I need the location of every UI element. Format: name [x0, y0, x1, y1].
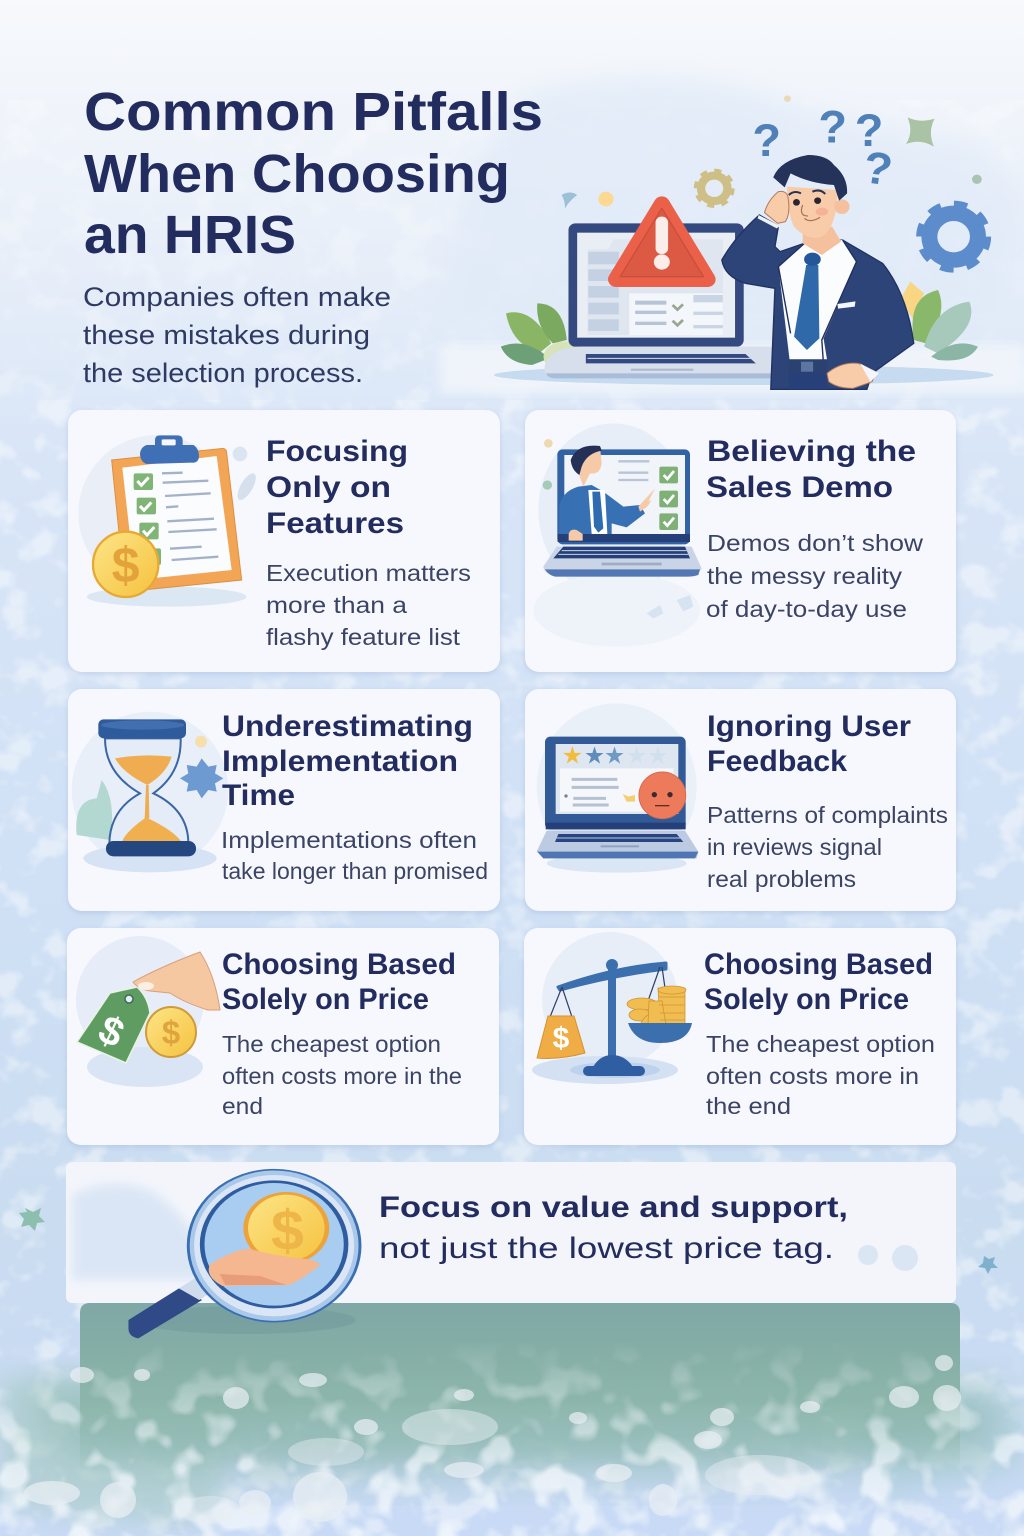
callout text: not just the lowest price tag. [379, 1232, 834, 1265]
heading: Features [266, 507, 404, 540]
icon: question marks: ? [860, 141, 896, 195]
text block: of day-to-day use [706, 596, 907, 622]
text block: the messy reality [707, 563, 903, 589]
neck [803, 227, 841, 255]
text block [706, 530, 923, 622]
text block: more than a [266, 592, 407, 618]
heading: Choosing Based [704, 948, 933, 981]
icon: clipboard with coin: $ [112, 538, 140, 594]
icon: laptop with reviews: ★ [647, 742, 668, 768]
callout text: Focus on value and support, [379, 1191, 848, 1224]
shirt [778, 240, 856, 359]
heading [707, 710, 911, 778]
icon: laptop with reviews [537, 703, 698, 873]
text block: the end [706, 1093, 791, 1119]
hair [773, 155, 847, 201]
panel: choosing based solely on price (tag) [67, 928, 499, 1145]
text block: often costs more in [706, 1063, 919, 1089]
text block: flashy feature list [266, 624, 461, 650]
icon: price tag and coin: $ [92, 1007, 131, 1056]
title: When Choosing [84, 144, 510, 204]
callout text [379, 1191, 848, 1265]
text block: end [222, 1093, 263, 1119]
heading [266, 435, 408, 540]
man [722, 155, 914, 389]
text block: in reviews signal [707, 834, 882, 860]
heading: Choosing Based [222, 948, 456, 981]
heading [704, 948, 933, 1016]
face [793, 199, 800, 206]
hero illustration: confused man with laptop and warning [494, 95, 994, 389]
subtitle [83, 282, 391, 388]
text block: The cheapest option [706, 1031, 935, 1057]
heading: Time [222, 779, 295, 812]
heading [706, 435, 916, 504]
icon: question marks: ? [855, 105, 883, 156]
icon: ground shadow [494, 365, 994, 385]
icon: price tag and coin [76, 936, 220, 1087]
icon: right plants [900, 282, 978, 361]
icon: price tag and coin: $ [162, 1014, 180, 1051]
heading: Implementation [222, 745, 458, 778]
text block: Demos don’t show [707, 530, 923, 556]
subtitle: Companies often make [83, 282, 391, 312]
heading: Focusing [266, 435, 408, 468]
heading: Solely on Price [222, 983, 429, 1016]
icon: hourglass [72, 712, 228, 872]
text block: real problems [707, 866, 856, 892]
icon: balance scale: $ [553, 1022, 570, 1055]
text block: Implementations often [221, 827, 477, 853]
panel: focusing only on features [68, 410, 500, 672]
heading [222, 710, 473, 812]
icon: blue gear [920, 204, 987, 269]
icon: laptop with reviews: ★ [584, 742, 605, 768]
heading: Ignoring User [707, 710, 911, 743]
icon: question marks: ? [818, 102, 847, 152]
tie [794, 265, 819, 350]
text block [266, 560, 471, 650]
title: an HRIS [84, 205, 296, 265]
title: Common Pitfalls [84, 82, 543, 142]
title [84, 82, 543, 265]
text block [222, 1031, 462, 1119]
text block [221, 827, 488, 884]
icon: clipboard with coin [78, 435, 259, 607]
heading: Only on [266, 471, 391, 504]
panel: ignoring user feedback [525, 689, 956, 911]
icon: balance scale [532, 932, 692, 1084]
subtitle: these mistakes during [83, 320, 370, 350]
panel: takeaway callout [66, 1162, 956, 1338]
jacket [722, 215, 914, 389]
hand on hip [827, 363, 876, 388]
text block: Patterns of complaints [707, 802, 948, 828]
icon: laptop with presenter [533, 423, 702, 647]
icon: laptop with reviews: ★ [562, 742, 583, 769]
heading: Feedback [707, 745, 847, 778]
panel: believing the sales demo [525, 410, 956, 672]
icon: laptop with reviews: ★ [626, 742, 647, 768]
panel: choosing based solely on price (scale) [524, 928, 956, 1145]
icon: laptop with reviews: ★ [604, 742, 625, 768]
heading: Solely on Price [704, 983, 909, 1016]
text block: often costs more in the [222, 1063, 462, 1089]
hand on head [765, 191, 789, 223]
head [787, 187, 837, 238]
text block [707, 802, 948, 892]
heading [222, 948, 456, 1016]
text block [706, 1031, 935, 1119]
icon: question marks: ? [752, 115, 781, 166]
icon: side sparkles [19, 1208, 998, 1274]
text block: take longer than promised [222, 858, 488, 884]
icon: magnifying glass with coin in hand: $ [271, 1200, 304, 1263]
heading: Underestimating [222, 710, 473, 743]
icon: green star [906, 117, 935, 147]
icon: small tan gear [696, 171, 732, 206]
text block: The cheapest option [222, 1031, 441, 1057]
panel: underestimating implementation time [68, 689, 500, 911]
icon: left plants [501, 303, 587, 372]
icon: magnifying glass with coin in hand [128, 1170, 360, 1338]
subtitle: the selection process. [83, 358, 363, 388]
icon: laptop [544, 223, 778, 378]
heading: Believing the [707, 435, 916, 468]
icon: small dots [562, 95, 982, 208]
heading: Sales Demo [706, 471, 893, 504]
blotches [24, 1355, 961, 1524]
icon: warning triangle [616, 204, 708, 279]
text block: Execution matters [266, 560, 471, 586]
icon: question marks [752, 102, 896, 195]
